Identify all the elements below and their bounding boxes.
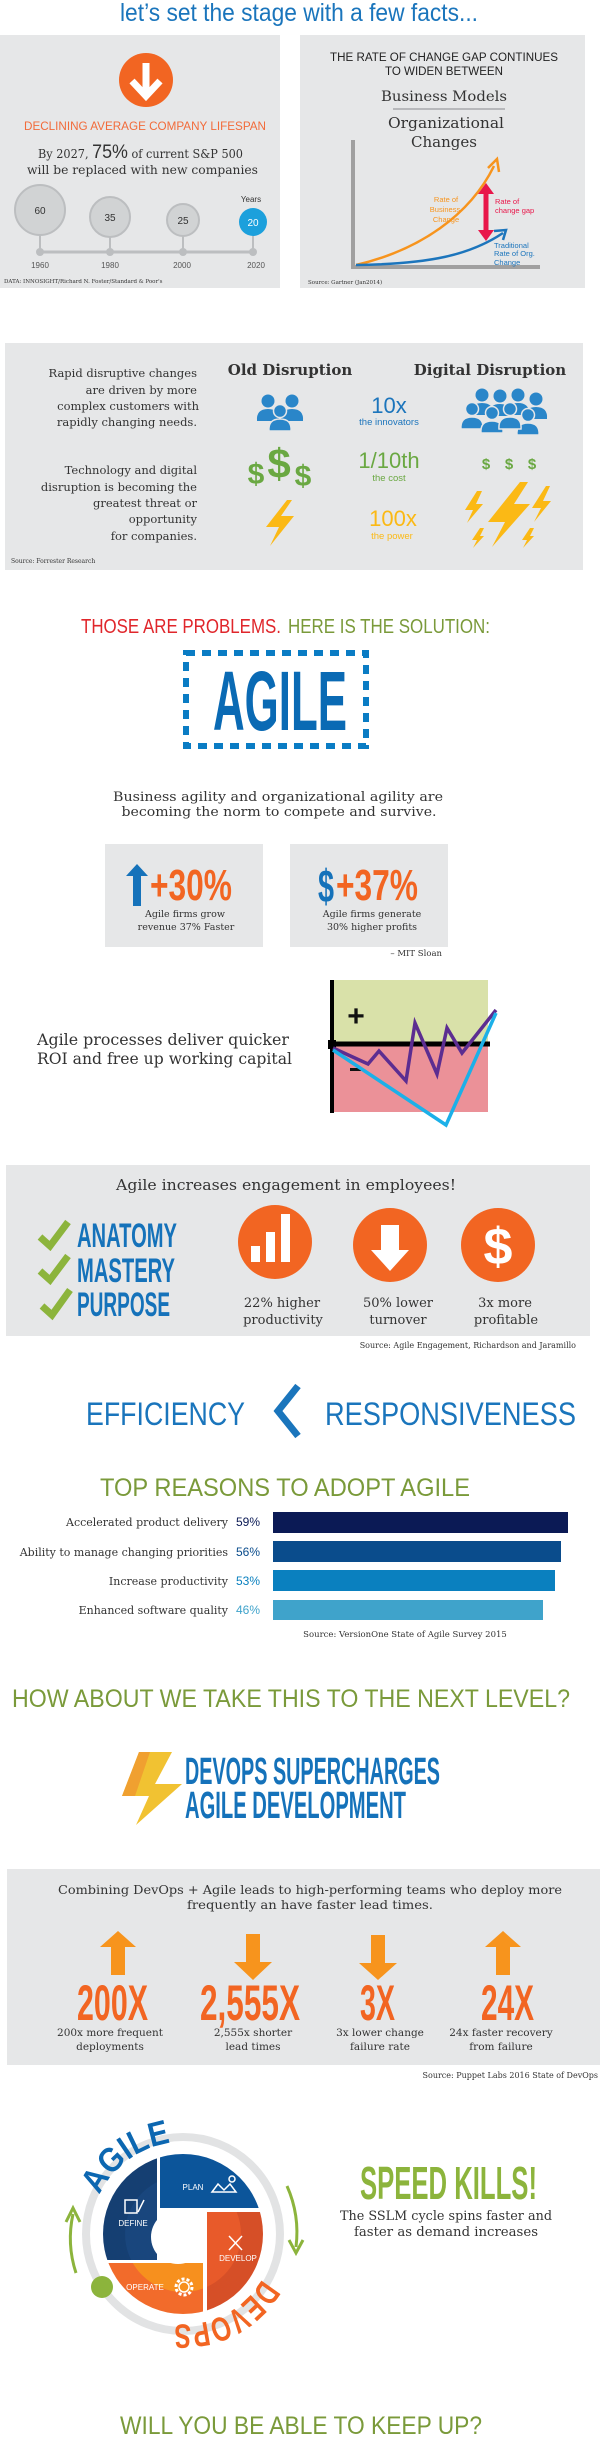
bar chart: Increase productivity (109, 1575, 229, 1588)
segment labels: OPERATE (126, 2283, 164, 2292)
icon: dollars: $ (295, 460, 312, 493)
arrows: green cycle (66, 2186, 303, 2273)
segment labels (118, 2183, 257, 2292)
chart: change curves: Rate of (495, 197, 520, 206)
checklist: MASTERY (77, 1252, 175, 1290)
efficiency < responsiveness (86, 1386, 576, 1436)
heading: problems / solution: THOSE ARE PROBLEMS. (81, 616, 281, 638)
timeline chart: 1980 (101, 261, 119, 270)
bar chart: Ability to manage changing priorities (19, 1546, 228, 1559)
text block: left: opportunity (129, 512, 197, 526)
icon: many bolts (465, 482, 551, 548)
text: ROI: ROI and free up working capital (37, 1049, 292, 1068)
devops heading with bolt (122, 1751, 440, 1827)
chart: change curves: Business (430, 205, 460, 214)
text block: left: rapidly changing needs. (57, 415, 197, 429)
efficiency < responsiveness: EFFICIENCY (86, 1396, 245, 1432)
bar chart: 46% (236, 1603, 260, 1617)
heading: Agile increases engagement in employees! (115, 1178, 456, 1194)
icon: dollars: $ (248, 458, 265, 491)
label: AGILE arc (100, 2143, 170, 2195)
segment labels: PLAN (183, 2183, 204, 2192)
numbers: 3X (360, 1975, 395, 2031)
heading: speed kills (340, 2157, 552, 2240)
icon: productivity (238, 1205, 312, 1279)
icon: bolt (122, 1752, 182, 1825)
text: by 2027 (27, 142, 258, 177)
text: business agility (113, 790, 443, 820)
bar chart: 56% (236, 1545, 260, 1559)
headings (228, 361, 566, 379)
heading: problems / solution: HERE IS THE SOLUTION: (288, 616, 490, 638)
panel: old vs digital disruption (5, 343, 583, 570)
chart: change curves: Rate of Org. (494, 249, 535, 258)
chart: change curves: Change (494, 258, 520, 267)
headings: Digital Disruption (414, 361, 566, 379)
bar chart: 53% (236, 1574, 260, 1588)
text block: left: disruption is becoming the (41, 480, 197, 494)
segment labels: DEVELOP (219, 2254, 257, 2263)
heading: TO WIDEN BETWEEN (385, 66, 503, 78)
text: business models vs organizational changes: Business Models (381, 89, 507, 105)
label: DEVOPS arc (175, 2279, 262, 2324)
panel: devops stats (7, 1869, 600, 2065)
cycle diagram: AGILE (84, 2120, 170, 2194)
chart: change curves: Rate of (434, 195, 459, 204)
source: MIT: – MIT Sloan (390, 949, 443, 959)
text block: left (41, 366, 200, 543)
icon: people small group (257, 394, 303, 431)
panel: engagement (6, 1165, 590, 1336)
checklist: PURPOSE (77, 1286, 170, 1324)
timeline chart: 35 (104, 213, 116, 224)
cycle diagram (64, 2120, 304, 2348)
text: business models vs organizational changes (381, 89, 507, 151)
timeline chart: 1960 (31, 261, 49, 270)
bar chart: Accelerated product delivery (65, 1516, 229, 1529)
labels: 3x lower change (336, 2027, 424, 2039)
middle stats: the cost (372, 473, 406, 484)
agile badge: AGILE (213, 654, 347, 748)
chart: change curves: change gap (495, 206, 534, 215)
timeline chart: Years (241, 195, 261, 204)
panel: rate of change gap (300, 35, 585, 288)
heading: keep up: WILL YOU BE ABLE TO KEEP UP? (120, 2412, 482, 2440)
numbers: 24X (481, 1975, 534, 2031)
panel: declining lifespan (0, 35, 280, 288)
source: Source: Agile Engagement, Richardson and Jaramillo (360, 1341, 576, 1350)
timeline chart: 60 (34, 206, 46, 217)
numbers (77, 1975, 534, 2031)
middle stats (358, 393, 420, 542)
timeline chart: 2020 (247, 261, 265, 270)
text block: left: complex customers with (57, 399, 200, 413)
numbers: 2,555X (200, 1975, 300, 2031)
text block: left: Technology and digital (65, 463, 197, 477)
heading: declining: DECLINING AVERAGE COMPANY LIFESPAN (24, 119, 266, 133)
timeline chart: 20 (247, 218, 259, 229)
labels: 50% lower (363, 1296, 434, 1311)
checklist (40, 1217, 177, 1324)
text block: left: greatest threat or (93, 496, 197, 510)
heading: top reasons: TOP REASONS TO ADOPT AGILE (100, 1474, 470, 1502)
bar chart: 59% (236, 1515, 260, 1529)
text: by 2027: By 2027, 75% of current S&P 500 (38, 142, 243, 163)
panel: devops stats: frequently an have faster lead times. (187, 1898, 433, 1912)
segment: plan (160, 2154, 259, 2208)
labels (243, 1296, 538, 1328)
text: business models vs organizational changes: Organizational (388, 114, 504, 132)
stat: +37% (290, 844, 448, 947)
labels: 2,555x shorter (214, 2027, 293, 2039)
labels: profitable (474, 1313, 538, 1328)
icon: crowd (461, 388, 547, 435)
heading: THE RATE OF CHANGE GAP CONTINUES (330, 52, 558, 64)
segment: define (103, 2158, 157, 2260)
icon: single bolt (266, 500, 294, 546)
stat: +37%: $ (318, 860, 334, 912)
labels: deployments (76, 2041, 144, 2053)
source: Source: Forrester Research (11, 558, 95, 565)
labels: 3x more (478, 1296, 532, 1311)
bar chart: Enhanced software quality (79, 1604, 229, 1617)
labels (57, 2027, 553, 2053)
icons in segments (125, 2176, 242, 2295)
text: business agility: Business agility and organizational agility are (113, 790, 443, 805)
icon: dollars: $ (267, 440, 291, 487)
timeline chart (15, 185, 267, 270)
text: by 2027: will be replaced with new companies (27, 163, 258, 177)
stat: +37%: Agile firms generate (322, 909, 422, 920)
devops heading with bolt: AGILE DEVELOPMENT (185, 1785, 406, 1827)
icons: arrows (100, 1931, 521, 1980)
labels: from failure (469, 2041, 533, 2053)
middle stats: 100x (369, 506, 417, 531)
labels: 200x more frequent (57, 2027, 164, 2039)
bar chart (19, 1512, 568, 1620)
segment: operate (108, 2263, 203, 2314)
heading (330, 52, 558, 78)
text block: left: for companies. (111, 529, 197, 543)
labels: failure rate (350, 2041, 410, 2053)
icon: small dollars: $ (482, 456, 491, 473)
segment labels: DEFINE (118, 2219, 148, 2228)
middle stats: the power (371, 531, 413, 542)
text: ROI: Agile processes deliver quicker (36, 1030, 289, 1049)
text: business models vs organizational changes: Changes (411, 133, 477, 151)
stat: +30%: Agile firms grow (144, 909, 225, 920)
chart: change curves: Change (433, 215, 459, 224)
timeline chart: 2000 (173, 261, 191, 270)
labels: lead times (225, 2041, 281, 2053)
source: Source: Puppet Labs 2016 State of DevOps (423, 2071, 598, 2080)
icon: small dollars (482, 456, 537, 473)
numbers: 200X (77, 1975, 148, 2031)
headings: Old Disruption (228, 361, 352, 379)
stat: +30%: revenue 37% Faster (138, 922, 235, 933)
labels: productivity (243, 1313, 324, 1328)
chart: change curves: Traditional (494, 241, 529, 250)
checklist: ANATOMY (77, 1217, 177, 1255)
text: business agility: becoming the norm to compete and survive. (122, 805, 436, 820)
cycle diagram: DEVOPS (175, 2280, 280, 2348)
middle stats: 1/10th (358, 448, 420, 473)
heading: problems / solution (81, 616, 490, 638)
icon: small dollars: $ (528, 456, 537, 473)
source: Source: Gartner (Jan2014) (308, 279, 382, 286)
heading: next level: HOW ABOUT WE TAKE THIS TO THE NEXT LEVEL? (12, 1685, 570, 1713)
chart: ROI (328, 980, 496, 1125)
icon: turnover (353, 1208, 427, 1282)
stat: +30% (105, 844, 263, 947)
heading: speed kills: The SSLM cycle spins faster and (340, 2209, 552, 2224)
labels: 24x faster recovery (449, 2027, 553, 2039)
icon: small dollars: $ (505, 456, 514, 473)
middle stats: 10x (371, 393, 407, 418)
labels: turnover (369, 1313, 427, 1328)
panel: devops stats: Combining DevOps + Agile leads to high-performing teams who deploy more (58, 1883, 562, 1897)
segment: develop (207, 2212, 263, 2310)
text: ROI (36, 1030, 292, 1068)
timeline chart: 25 (177, 216, 189, 227)
chart: change curves (351, 140, 540, 269)
icon: profit (461, 1208, 535, 1282)
text block: left: Rapid disruptive changes (49, 366, 197, 380)
source: DATA: INNOSIGHT/Richard N. Foster/Standard & Poor's (4, 279, 163, 285)
middle stats: the innovators (359, 417, 419, 428)
heading: speed kills: faster as demand increases (354, 2225, 538, 2240)
source: Source: VersionOne State of Agile Survey 2015 (303, 1630, 507, 1640)
stat: +30%: +30% (150, 861, 232, 910)
icon: dollars (248, 440, 312, 493)
icon: orange down arrow (119, 53, 173, 107)
chart: ROI: + (347, 1000, 365, 1033)
labels: 22% higher (244, 1296, 321, 1311)
text block: left: are driven by more (86, 383, 197, 397)
stat: +37%: +37% (336, 861, 418, 910)
stat: +37%: 30% higher profits (327, 922, 417, 933)
agile badge (186, 653, 366, 748)
icon: profit: $ (484, 1218, 513, 1276)
